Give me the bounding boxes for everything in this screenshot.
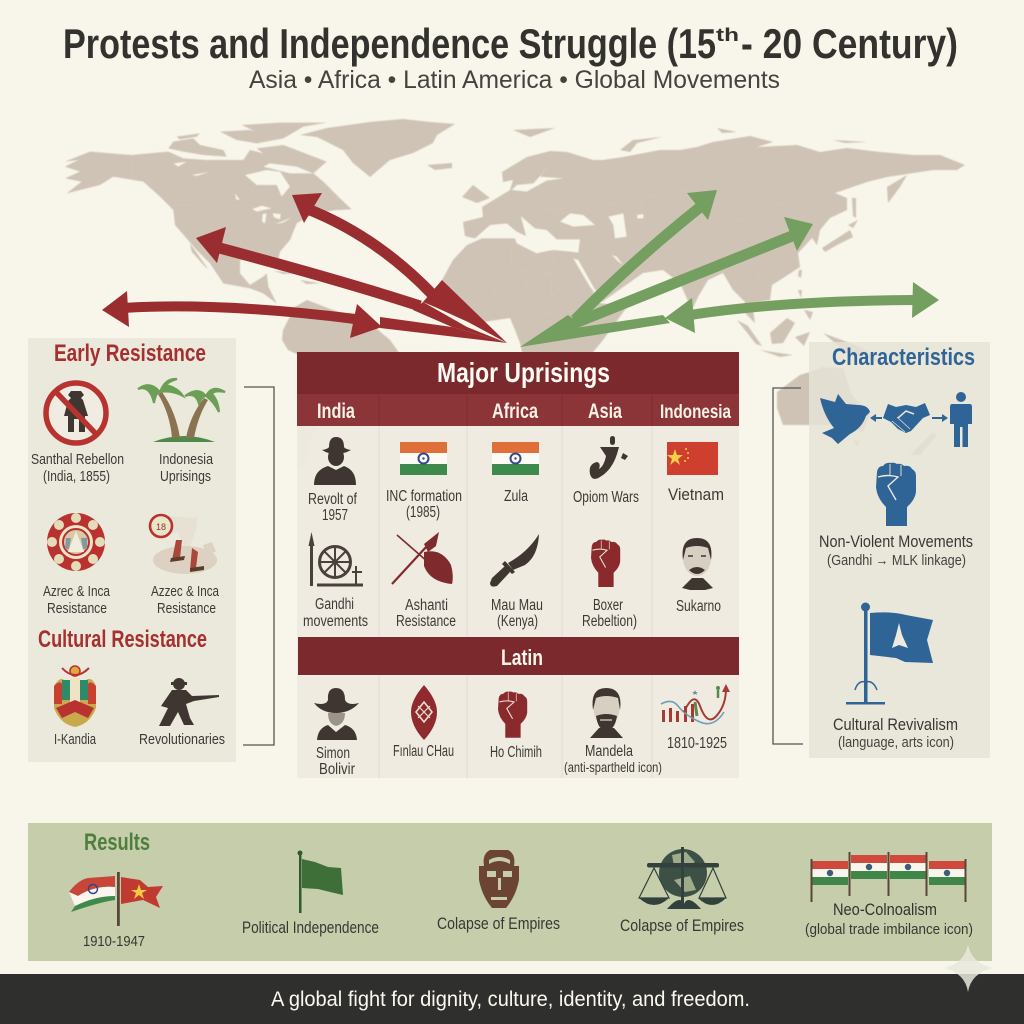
label: Aztec and Inca Resistance second: Resistance — [157, 601, 216, 617]
Japan and Sakhalin — [822, 198, 858, 252]
red arrows — [102, 193, 507, 343]
Iceland — [427, 163, 452, 170]
column headers: Africa — [492, 400, 538, 423]
text: Mandela — [564, 743, 662, 775]
dove — [820, 394, 870, 444]
label: Aztec and Inca Resistance second — [151, 584, 220, 617]
text: Mau Mau: Mau Mau — [491, 597, 543, 614]
footer text: A global fight for dignity, culture, identity, and freedom. — [271, 988, 750, 1011]
label: Santhal Rebellion: (India, 1855) — [43, 469, 110, 485]
column headers: Indonesia — [660, 402, 731, 423]
South America — [282, 300, 400, 354]
label: Neo-Colonialism: (global trade imbilance icon) — [805, 921, 973, 938]
faint map under table — [298, 428, 315, 470]
panel: Major Uprisings table — [297, 352, 739, 778]
map borders — [470, 187, 690, 313]
text: Cultural Revivalism: (language, arts icon) — [838, 734, 954, 751]
text: Ashanti Resistance — [396, 597, 456, 630]
text: Sukarno: Sukarno — [676, 598, 721, 615]
text: Cultural Revivalism: Cultural Revivalism — [833, 715, 958, 734]
icon: Aztec medallion — [47, 513, 105, 571]
icon: flag of India — [400, 442, 447, 475]
text: Non-Violent Movements — [819, 532, 973, 569]
text: Gandhi movements: Gandhi — [315, 596, 354, 613]
title: Protests and Independence Struggle (15 — [63, 20, 716, 67]
Svalbard and Arctic islands — [513, 128, 867, 152]
text: Cultural Revivalism — [833, 715, 958, 751]
icon: man in hat — [314, 437, 356, 485]
Greenland — [300, 119, 455, 177]
Africa — [442, 237, 627, 356]
Britain — [462, 185, 490, 203]
label: Indonesia Uprisings: Indonesia — [159, 452, 214, 468]
label: Aztec and Inca Resistance: Azrec & Inca — [43, 584, 111, 600]
icon: globe and scales — [639, 847, 726, 909]
icon: green flag — [298, 850, 343, 913]
text: Mau Mau — [491, 597, 543, 630]
text: Mau Mau: (Kenya) — [497, 613, 538, 630]
double arrow to the Pacific — [520, 282, 939, 347]
label: Aztec and Inca Resistance: Resistance — [47, 601, 107, 617]
icon: red fist Boxer — [591, 540, 620, 587]
text: Boxer Rebellion: Boxer — [593, 597, 623, 614]
icon: palm trees — [138, 379, 225, 442]
panel: Results — [28, 823, 992, 961]
arrow to Central Asia — [520, 190, 717, 347]
text: Vietnam: Vietnam — [668, 485, 724, 504]
label: 1910-1947: 1910-1947 — [83, 933, 145, 950]
text: Opium Wars: Opiom Wars — [573, 489, 639, 506]
text: INC formation — [386, 488, 462, 521]
icon: crossed flags — [69, 872, 163, 926]
label: Collapse of Empires second: Colapse of Empires — [620, 917, 744, 935]
icon: machete — [490, 534, 539, 587]
icon: warrior figure — [150, 515, 217, 574]
Kamchatka — [887, 175, 907, 203]
label: Collapse of Empires: Colapse of Empires — [437, 915, 560, 933]
text: Boxer Rebellion — [582, 597, 637, 630]
text: Simon Bolivir: Simon — [316, 745, 350, 762]
North America — [65, 123, 352, 303]
New Zealand and Tasmania — [853, 432, 937, 455]
column headers: India — [317, 400, 355, 423]
label: Santhal Rebellion: Santhal Rebellon — [31, 452, 124, 468]
green arrows — [520, 190, 939, 347]
label: Indonesia Uprisings: Uprisings — [160, 469, 211, 485]
text: INC formation: (1985) — [406, 504, 440, 521]
title: th — [716, 25, 739, 45]
text: Ho Chi Minh: Ho Chimih — [490, 744, 542, 761]
text: Boxer Rebellion: Rebeltion) — [582, 613, 637, 630]
label: Santhal Rebellion — [31, 452, 124, 485]
text: Simon Bolivir: Bolivir — [319, 761, 355, 778]
handshake — [883, 403, 930, 433]
icon: flag of China — [667, 442, 718, 475]
text: Ashanti Resistance: Ashanti — [405, 597, 448, 614]
text: INC formation: INC formation — [386, 488, 462, 505]
Eurasia — [463, 136, 965, 323]
subtitle: Asia • Africa • Latin America • Global Movements — [249, 66, 780, 94]
column headers — [317, 400, 731, 423]
heading: Early Resistance: Early Resistance — [54, 340, 206, 367]
column headers: Asia — [588, 400, 622, 423]
icon: warrior figure: 18 — [156, 522, 166, 532]
text: Mandela: Mandela — [585, 743, 633, 760]
text: Non-Violent Movements: Non-Violent Movements — [819, 532, 973, 551]
linkage arrows — [870, 414, 948, 422]
icon: Simon Bolivar — [314, 688, 359, 740]
label: Neo-Colonialism — [805, 901, 973, 938]
world map — [65, 119, 965, 470]
heading: Results: Results — [84, 829, 150, 856]
person — [956, 392, 966, 402]
icon: shield — [411, 685, 437, 740]
icon: opium pipe — [590, 436, 628, 479]
double arrow to the Pacific — [102, 291, 507, 343]
text: Zula: Zula — [504, 488, 528, 505]
heading: Major Uprisings: Major Uprisings — [437, 357, 610, 388]
icon: dove, handshake and person — [820, 392, 972, 447]
title: - 20 Century) — [741, 20, 958, 67]
label: Aztec and Inca Resistance second: Azzec & Inca — [151, 584, 220, 600]
icon: tribal mask — [54, 666, 96, 727]
icon: Mandela portrait — [590, 688, 623, 738]
panel: Characteristics — [809, 342, 990, 758]
text: Revolt of 1957: 1957 — [322, 507, 348, 524]
icon: blue flag — [846, 602, 933, 704]
arrow to East Asia — [520, 217, 813, 347]
arrow to Canada — [292, 193, 507, 343]
Southeast Asia islands — [737, 270, 880, 362]
label: Political Independence: Political Independence — [242, 919, 379, 937]
icon: red fist Ho Chi Minh — [498, 691, 527, 738]
icon: flag of India second — [492, 442, 539, 475]
heading: Latin: Latin — [501, 645, 543, 670]
text: years: 1810-1925 — [667, 735, 727, 752]
icon: spinning wheel — [308, 532, 363, 586]
bracket: right — [773, 388, 803, 744]
label: Indonesia Uprisings — [159, 452, 214, 485]
label: I-Kandia: I-Kandia — [54, 732, 97, 748]
icon: trend chart — [661, 684, 730, 724]
text: Revolt of 1957 — [308, 491, 358, 524]
icon: African mask — [479, 850, 519, 908]
heading: Cultural Resistance: Cultural Resistance — [38, 626, 207, 653]
icon: Sukarno portrait — [682, 538, 713, 590]
icon: rifleman — [159, 678, 219, 726]
text: Gandhi movements — [303, 596, 368, 630]
label: Aztec and Inca Resistance — [43, 584, 111, 617]
text: Ashanti Resistance: Resistance — [396, 613, 456, 630]
text: Mandela: (anti-spartheld icon) — [564, 760, 662, 775]
text: Simon Bolivir — [316, 745, 355, 778]
icon: blue fist — [876, 463, 916, 526]
text: Non-Violent Movements: (Gandhi → MLK linkage) — [827, 552, 966, 569]
label: Neo-Colonialism: Neo-Colnoalism — [833, 901, 937, 919]
text: Gandhi movements: movements — [303, 613, 368, 630]
text: Revolt of 1957: Revolt of — [308, 491, 358, 508]
text: Finlau Chau: Fınlau CHau — [393, 743, 454, 760]
watermark sparkle — [944, 944, 993, 992]
arrow to Mexico — [196, 227, 507, 343]
icon: spear and leaf — [392, 532, 453, 584]
icon: prohibited figure — [46, 383, 106, 443]
heading: Characteristics: Characteristics — [832, 344, 975, 371]
label: Revolutionaries: Revolutionaries — [139, 732, 225, 748]
footer band — [0, 974, 1024, 1024]
icon: row of flags — [810, 852, 966, 902]
Australia — [777, 367, 870, 432]
panel: Early Resistance — [28, 338, 236, 762]
bracket: left — [243, 387, 274, 745]
map inland seas — [475, 165, 643, 300]
